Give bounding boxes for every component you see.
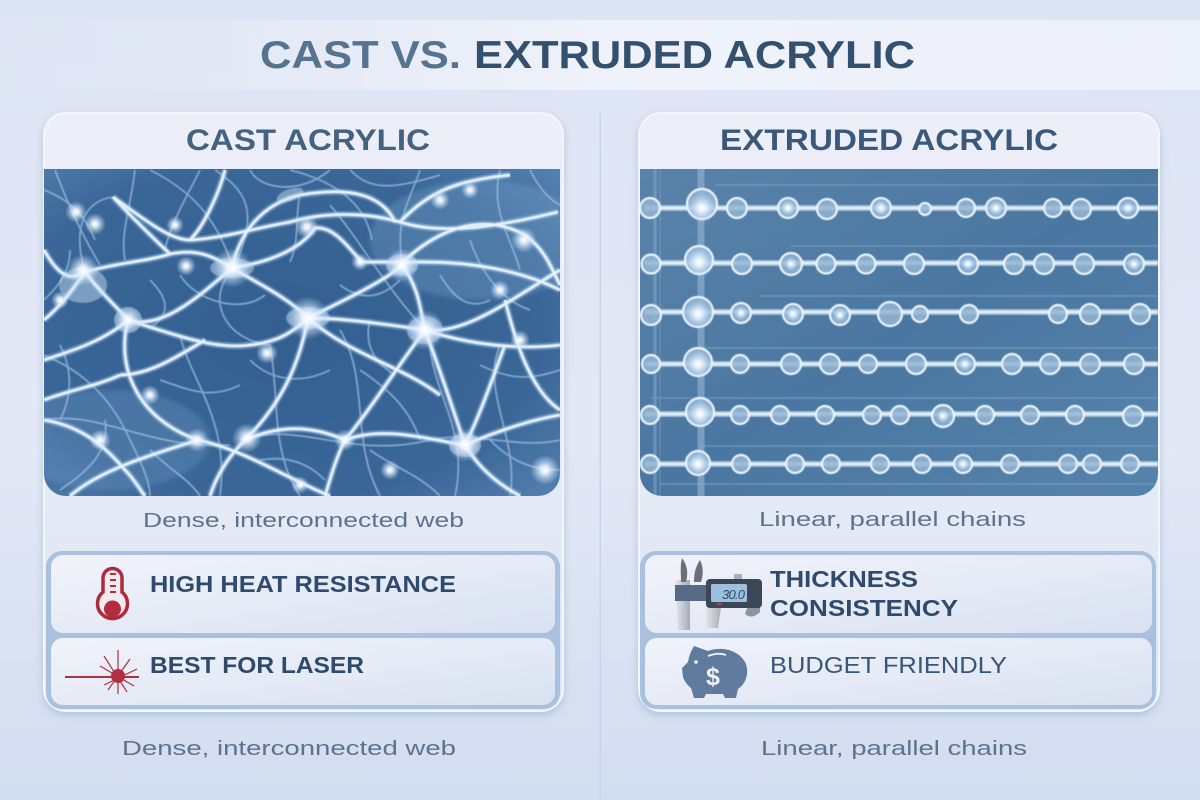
heading: extruded acrylic: EXTRUDED ACRYLIC — [720, 124, 1058, 157]
icon: caliper — [675, 558, 762, 630]
feature text: thickness consistency — [770, 566, 958, 621]
feature group: extruded — [640, 551, 1156, 709]
feature: high heat resistance: HIGH HEAT RESISTANCE — [150, 571, 456, 597]
title: EXTRUDED ACRYLIC — [474, 34, 915, 77]
title: CAST VS. — [260, 34, 461, 77]
feature: budget friendly — [645, 638, 1152, 705]
image: dense interconnected web — [10, 169, 590, 496]
panel: extruded acrylic — [639, 113, 1159, 711]
panel: cast acrylic — [10, 113, 590, 711]
feature text: thickness consistency: CONSISTENCY — [770, 595, 958, 621]
feature: budget friendly: BUDGET FRIENDLY — [770, 652, 1007, 678]
caption: cast structure: Dense, interconnected web — [143, 510, 464, 532]
caption: extruded structure: Linear, parallel chains — [759, 509, 1026, 531]
icon: caliper: 30.0 — [722, 587, 746, 602]
feature: high heat resistance — [51, 555, 555, 633]
icon: thermometer — [98, 568, 128, 619]
title — [260, 34, 915, 77]
feature text: thickness consistency: THICKNESS — [770, 566, 918, 592]
feature group: cast — [46, 551, 560, 709]
feature: thickness consistency — [645, 555, 1152, 633]
heading: cast acrylic: CAST ACRYLIC — [186, 124, 430, 157]
title banner — [0, 20, 1200, 90]
feature: best for laser: BEST FOR LASER — [150, 652, 364, 678]
caption: cast lower: Dense, interconnected web — [122, 737, 456, 760]
icon: laser — [65, 650, 139, 694]
icon: piggy bank: $ — [706, 663, 720, 691]
caption: extruded lower: Linear, parallel chains — [761, 737, 1027, 760]
image: linear parallel chains — [640, 169, 1158, 496]
feature: best for laser — [51, 638, 555, 705]
icon: piggy bank — [682, 646, 747, 698]
